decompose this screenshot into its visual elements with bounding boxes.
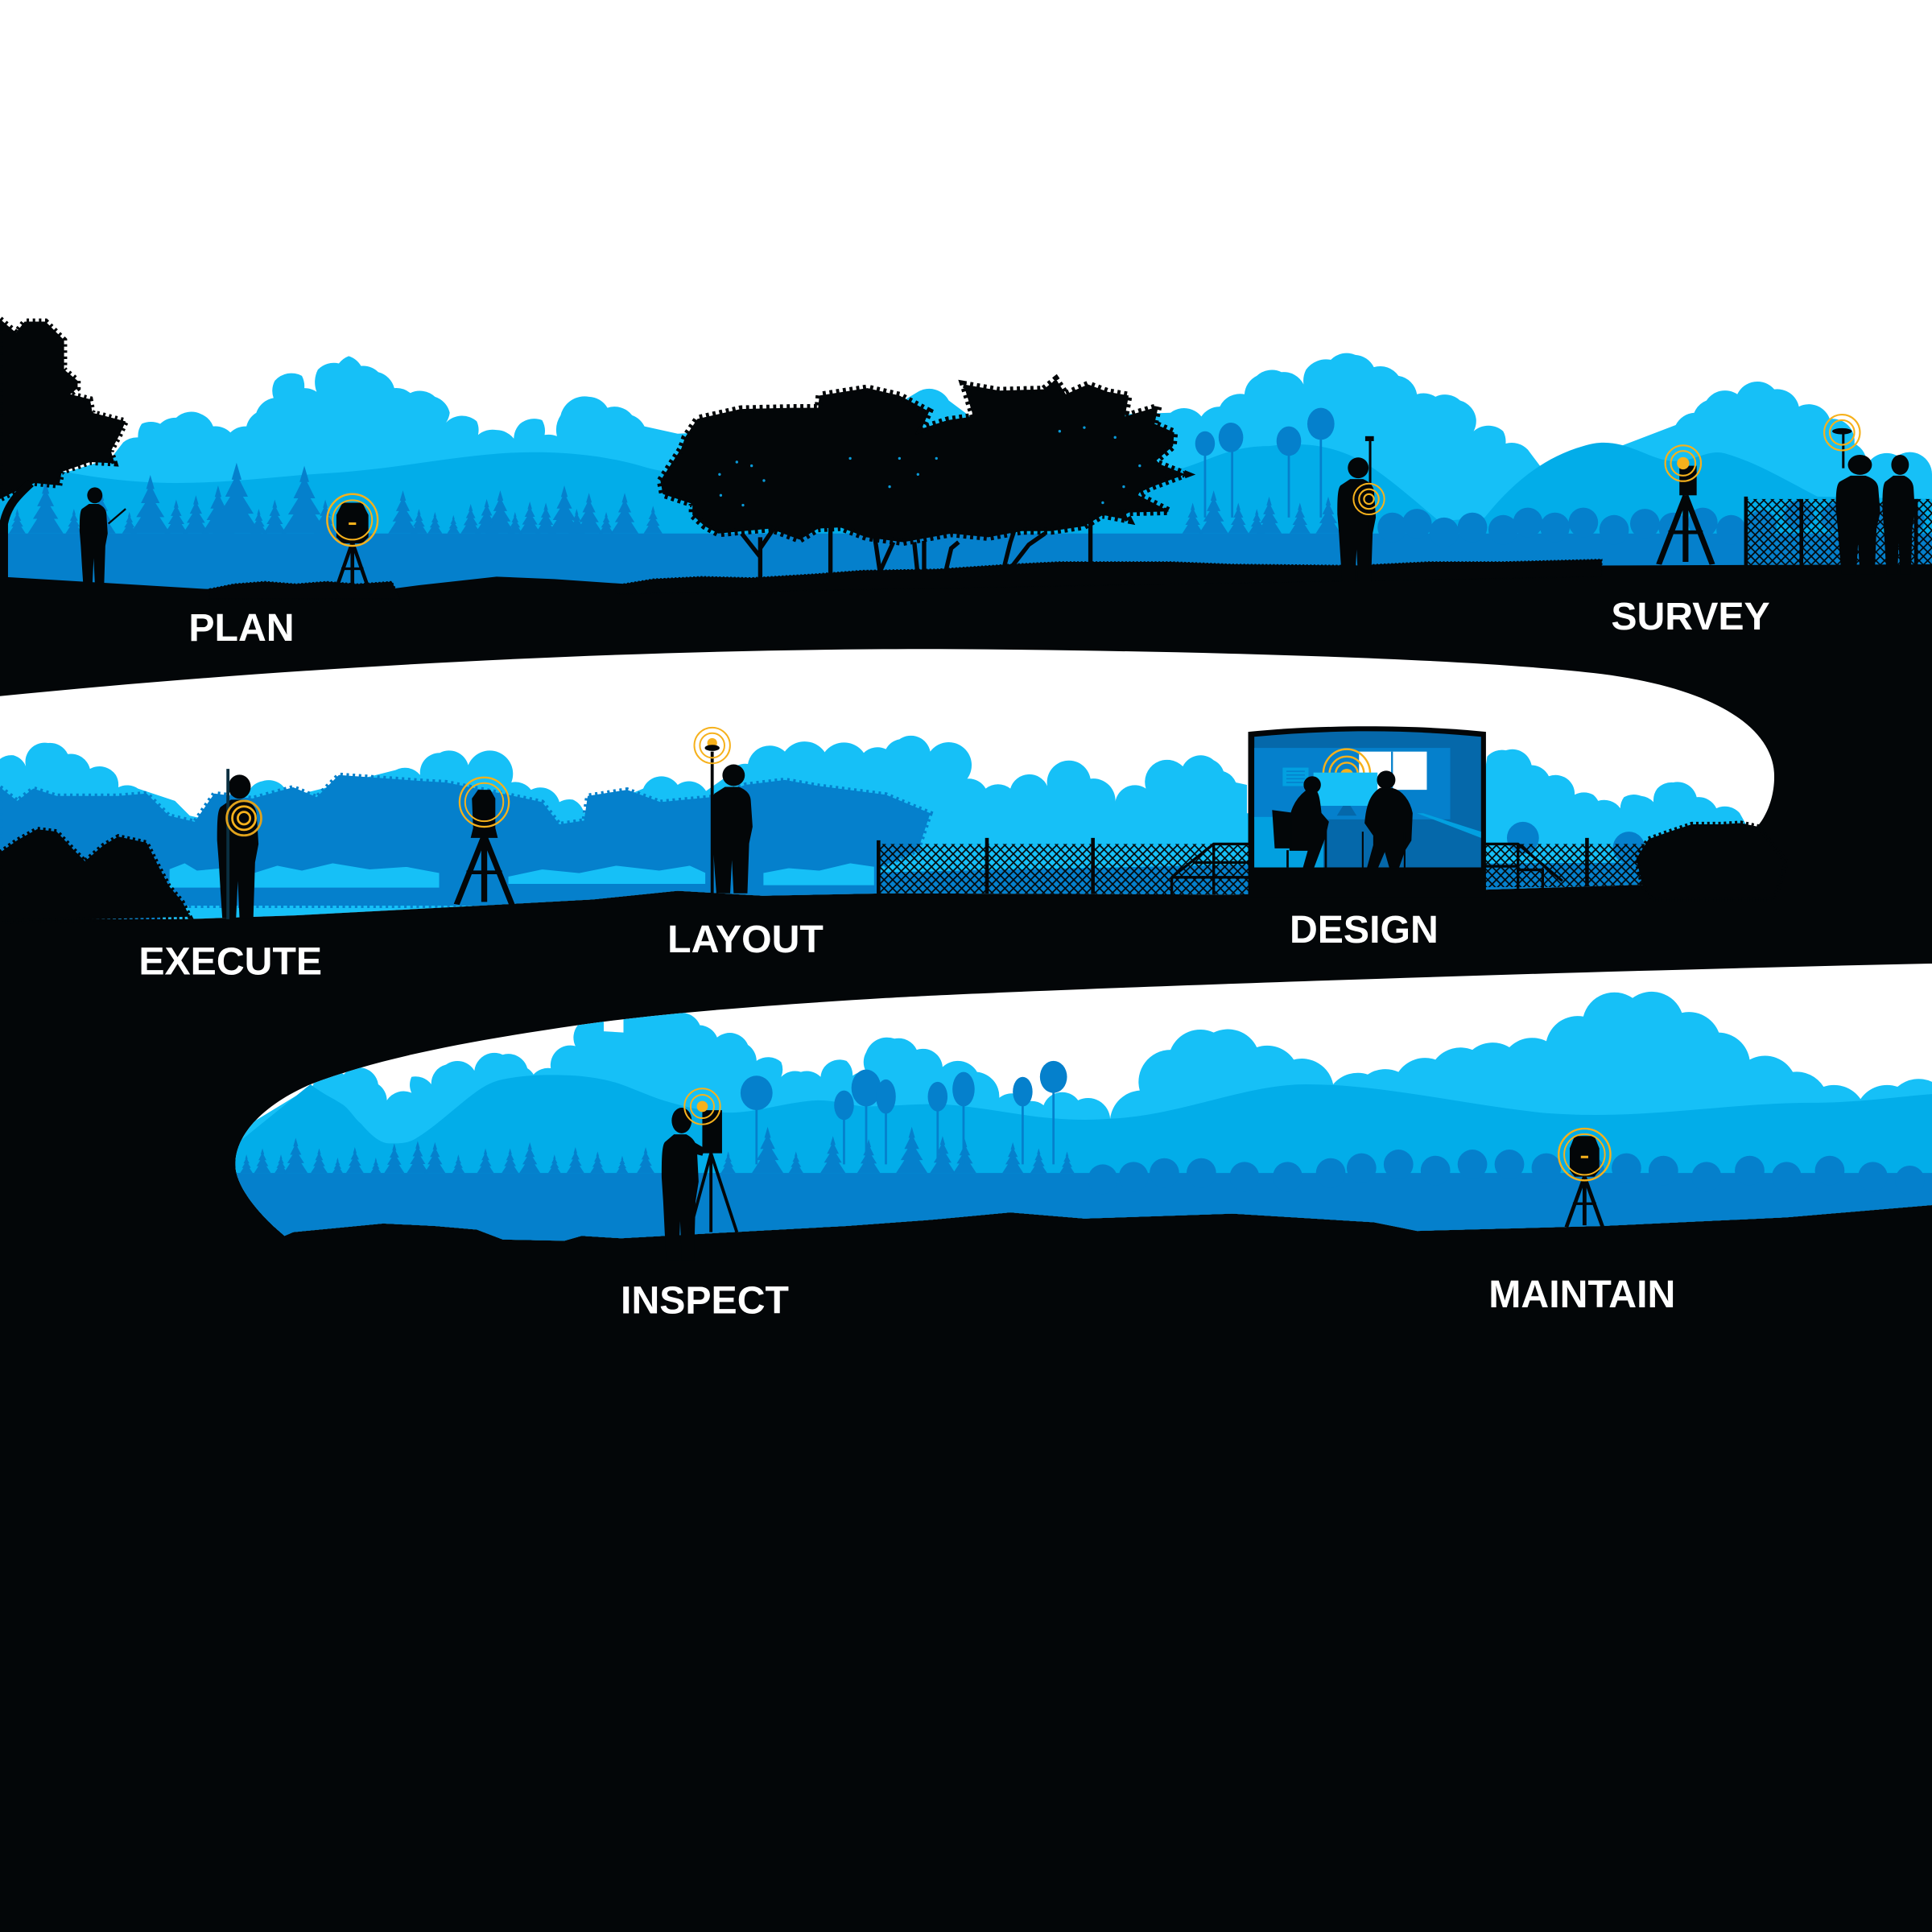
cabin frame (1249, 726, 1486, 897)
panel: middle landscape window (0, 641, 1786, 936)
stairs right of cabin (1484, 844, 1563, 890)
label: EXECUTE: EXECUTE (138, 940, 322, 984)
trunks (741, 518, 1091, 583)
hills lower band (234, 1075, 1932, 1245)
label: SURVEY: SURVEY (1611, 595, 1770, 638)
blue ground behind fence (881, 863, 1642, 895)
tree: left foreground (0, 319, 126, 579)
light gaps beneath the tree canopy (169, 862, 875, 889)
instrument: survey total station (1659, 445, 1712, 564)
cabin inner wall (1254, 748, 1451, 819)
label: MAINTAIN: MAINTAIN (1488, 1273, 1675, 1316)
fence: top right (1744, 497, 1932, 567)
panel: top landscape scene (0, 353, 1932, 604)
cabin outer wall (1254, 731, 1481, 868)
left tree foliage (0, 319, 126, 499)
figures: two men with GPS pole at fence (1824, 415, 1915, 574)
tall pines top band (1195, 408, 1335, 518)
label: DESIGN: DESIGN (1290, 908, 1439, 952)
window (1359, 752, 1426, 790)
tall pines lower band (741, 1061, 1067, 1164)
panel: lower landscape window (222, 955, 1932, 1257)
seated person right (1363, 771, 1412, 868)
clouds top band (0, 353, 1932, 604)
ground mask lower (285, 1205, 1932, 1241)
figure: execute operator with pole (217, 769, 261, 919)
figure: layout operator with GPS pole (694, 728, 753, 894)
label: LAYOUT: LAYOUT (667, 918, 824, 961)
monitor (1314, 773, 1377, 815)
instrument: maintain total station (1558, 1129, 1611, 1227)
cabin desk edge (1417, 813, 1481, 838)
label: PLAN: PLAN (188, 606, 295, 650)
clouds lower band (234, 992, 1932, 1245)
bush right middle (1637, 823, 1786, 899)
figure: inspect operator at instrument (662, 1088, 737, 1261)
instrument: plan total station (327, 494, 378, 592)
left tree trunk (4, 483, 31, 579)
bush left middle (0, 829, 190, 922)
forest top band (0, 408, 1932, 604)
forest lower band (234, 1061, 1932, 1245)
black ground mass (0, 564, 1932, 1932)
hills top band (0, 443, 1932, 604)
signal rings (1323, 749, 1370, 774)
design cabin (1249, 726, 1486, 897)
instrument: execute total station (456, 778, 512, 904)
canopy (660, 379, 1185, 542)
round trees lower band (1103, 1164, 1909, 1180)
small sky gaps in canopy (720, 427, 1140, 506)
chain link fence middle band (878, 838, 1645, 897)
ground mask middle (97, 885, 1642, 919)
label: INSPECT: INSPECT (621, 1279, 789, 1323)
stairs left of cabin (1172, 844, 1249, 894)
figure: plan operator with controller (80, 487, 126, 583)
seated person left (1273, 777, 1328, 868)
cabin left counter (1254, 817, 1323, 868)
wall vent (1282, 768, 1309, 786)
tree line middle band (0, 775, 931, 919)
tree cluster: black centre (660, 379, 1185, 583)
figure: survey rover with pole (1337, 436, 1385, 581)
clouds middle band (0, 736, 1762, 924)
grass tufts (209, 559, 1602, 599)
